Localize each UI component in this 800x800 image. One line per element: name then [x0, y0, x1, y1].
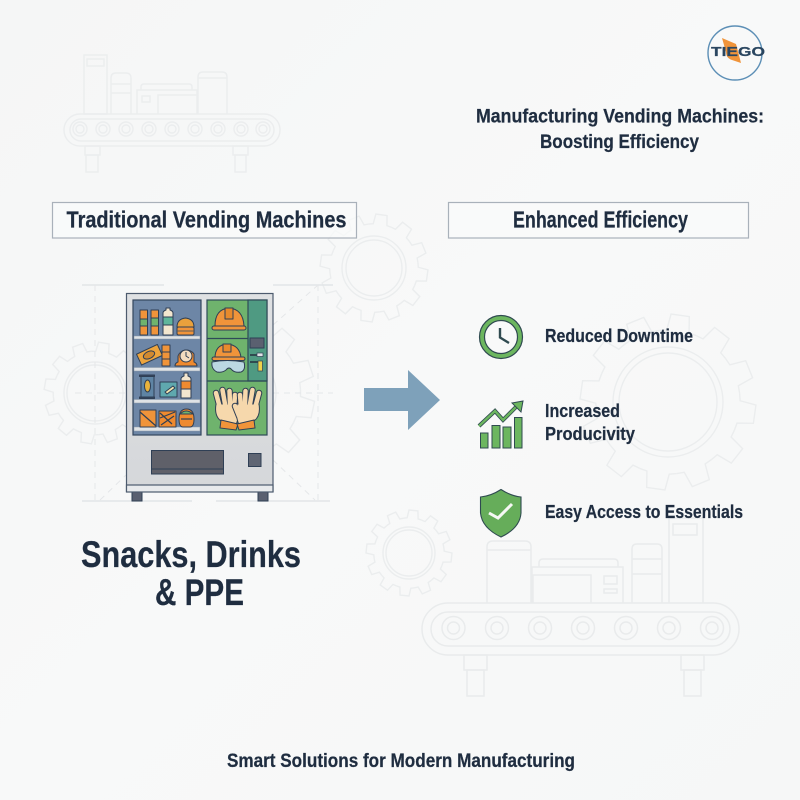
background gear: large right [569, 303, 767, 501]
logo wordmark: TIEGO [711, 44, 765, 59]
icon: hard hat [212, 308, 246, 330]
icon: clock [480, 316, 522, 358]
title: Boosting Efficiency [540, 132, 699, 153]
snack compartment [133, 300, 201, 435]
text: increased producivity: Producivity [545, 423, 636, 444]
logo orange swoosh [722, 38, 741, 63]
icon: shield [480, 490, 521, 537]
background gear: lower middle [362, 506, 456, 600]
icon: hard hat with goggles [212, 344, 245, 372]
benefit: reduced downtime [480, 316, 693, 358]
icon: control panel [250, 338, 264, 371]
shelf 1 products [140, 308, 194, 335]
machine body [126, 294, 273, 492]
icon: gloves [216, 390, 259, 430]
logo ring [708, 26, 762, 80]
collection tray [152, 450, 224, 474]
background gear: left [36, 334, 154, 452]
benefit: easy access to essentials [480, 490, 743, 537]
heading: enhanced efficiency: Enhanced Efficiency [513, 206, 688, 232]
arrow [364, 370, 440, 430]
text: increased producivity [545, 400, 636, 444]
background conveyor: top left [64, 55, 280, 172]
payment button [248, 454, 261, 466]
title [476, 106, 764, 153]
ppe compartment [207, 300, 267, 435]
left glove [216, 390, 240, 430]
heading: enhanced efficiency [448, 202, 748, 238]
text: reduced downtime: Reduced Downtime [545, 325, 693, 346]
background conveyor: bottom right [422, 518, 739, 696]
label: snacks, drinks and ppe: & PPE [155, 572, 244, 613]
background gear: behind machine [141, 299, 329, 487]
footer tagline: Smart Solutions for Modern Manufacturing [227, 751, 575, 772]
shelf 3 products [140, 373, 191, 398]
label: snacks, drinks and ppe: Snacks, Drinks [81, 534, 301, 575]
text: increased producivity: Increased [545, 400, 620, 421]
text: easy access: Easy Access to Essentials [545, 501, 743, 522]
right glove [235, 390, 259, 430]
background gear: top centre [313, 207, 435, 329]
logo [708, 26, 765, 80]
shelf 2 products [136, 344, 197, 366]
icon: growth chart [479, 401, 523, 448]
shelf 4 products [140, 409, 194, 427]
vending machine [126, 294, 273, 501]
title: Manufacturing Vending Machines: [476, 106, 764, 128]
label: snacks, drinks and ppe [81, 534, 301, 613]
blueprint guide lines around machine [75, 285, 333, 501]
machine feet [132, 491, 268, 501]
heading: traditional vending machines: Traditional Vending Machines [66, 206, 346, 232]
benefit: increased productivity [479, 400, 636, 448]
shelves [134, 336, 200, 431]
heading: traditional vending machines [52, 202, 356, 238]
machine base strip [126, 485, 273, 492]
